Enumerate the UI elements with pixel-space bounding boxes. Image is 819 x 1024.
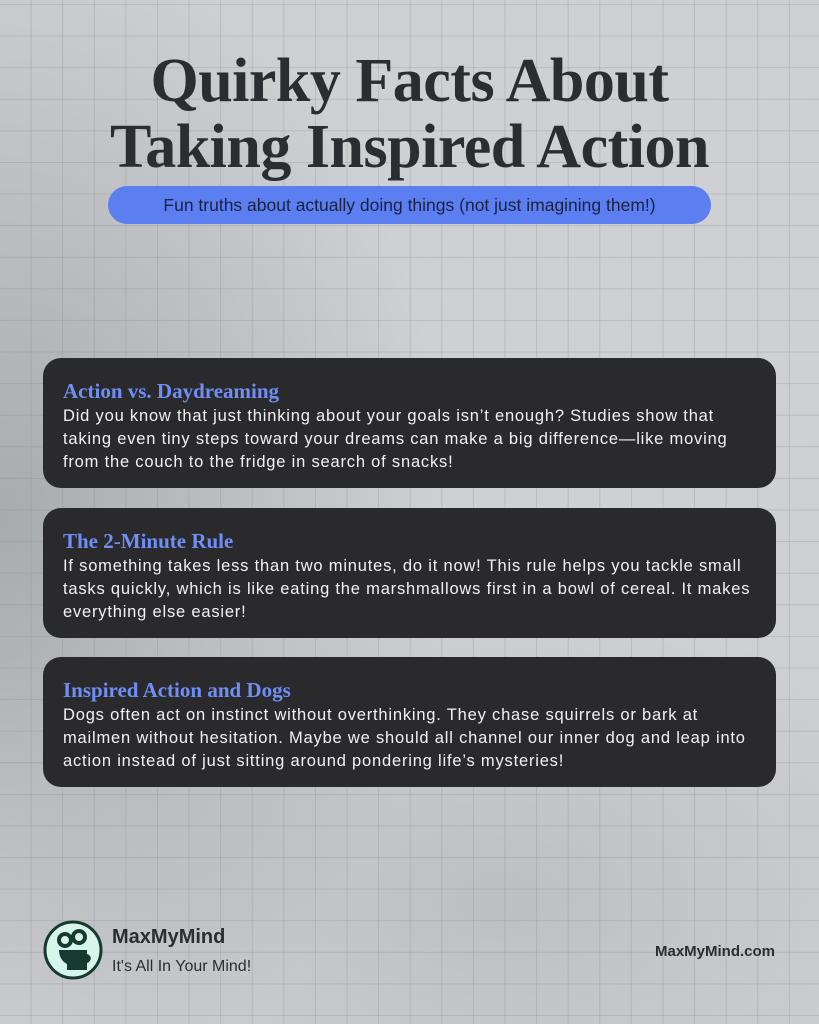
panel: action vs daydreaming: from the couch to the fridge in search of snacks! — [63, 453, 453, 471]
brand name: MaxMyMind — [112, 926, 225, 948]
panel: dogs: action instead of just sitting around pondering life’s mysteries! — [63, 752, 564, 770]
icon: logo — [44, 920, 102, 980]
panel: 2-minute rule: The 2-Minute Rule — [63, 529, 233, 553]
panel: dogs — [43, 657, 776, 787]
panel: dogs: mailmen without hesitation. Maybe we should all channel our inner dog and leap into — [63, 729, 746, 747]
panel: action vs daydreaming: Action vs. Daydreaming — [63, 379, 279, 403]
panel: dogs: Dogs often act on instinct without overthinking. They chase squirrels or bark at — [63, 706, 698, 724]
title — [110, 47, 709, 181]
panel: 2-minute rule — [43, 508, 776, 638]
panel: action vs daydreaming: Did you know that just thinking about your goals isn’t enough? Studies show that — [63, 407, 714, 425]
panel: 2-minute rule: tasks quickly, which is like eating the marshmallows first in a bowl of cereal. It makes — [63, 580, 750, 598]
panel: action vs daydreaming — [43, 358, 776, 488]
panel: action vs daydreaming: taking even tiny steps toward your dreams can make a big difference—like moving — [63, 430, 728, 448]
panel: 2-minute rule: If something takes less than two minutes, do it now! This rule helps you tackle small — [63, 557, 741, 575]
subtitle pill: Fun truths about actually doing things (not just imagining them!) — [163, 195, 656, 215]
website: MaxMyMind.com — [655, 943, 775, 960]
panel: dogs: Inspired Action and Dogs — [63, 678, 291, 702]
title: Quirky Facts About — [150, 47, 669, 115]
subtitle pill — [108, 186, 711, 224]
title: Taking Inspired Action — [110, 113, 709, 181]
tagline: It's All In Your Mind! — [112, 958, 251, 975]
panel: 2-minute rule: everything else easier! — [63, 603, 246, 621]
